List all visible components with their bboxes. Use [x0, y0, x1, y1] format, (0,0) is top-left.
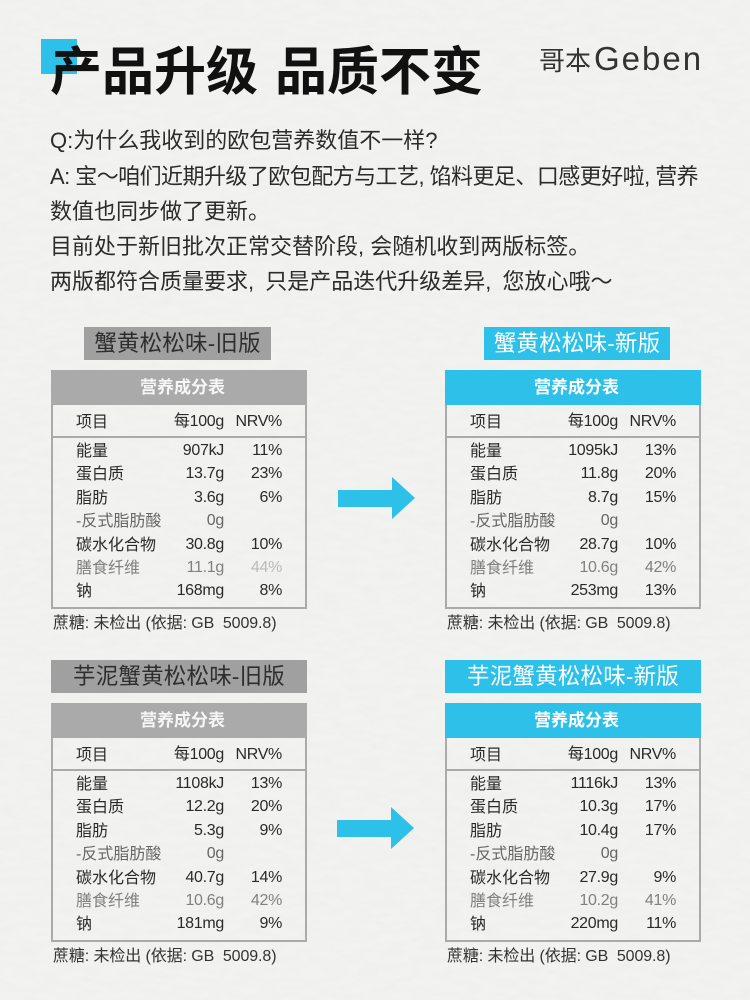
panel: old taro nutrition table: 13%	[251, 775, 282, 792]
panel: new crab roe nutrition table: 营养成分表	[534, 378, 619, 397]
panel: old crab roe nutrition table: 44%	[251, 559, 282, 576]
panel: old crab roe nutrition table: 碳水化合物	[76, 537, 156, 554]
panel: new crab roe nutrition table: 8.7g	[588, 489, 618, 506]
panel: old crab roe nutrition table: 钠	[76, 583, 92, 600]
panel: new crab roe nutrition table: 15%	[645, 489, 676, 506]
panel: new taro nutrition table: 11%	[646, 915, 676, 932]
panel: new crab roe nutrition table: 蛋白质	[470, 466, 518, 483]
panel: new taro nutrition table: 10.3g	[579, 798, 618, 815]
panel: old taro nutrition table: 20%	[251, 798, 282, 815]
panel: old taro nutrition table: 能量	[76, 776, 108, 793]
heading: old taro version	[51, 660, 307, 693]
panel: new taro nutrition table: 膳食纤维	[470, 893, 534, 910]
arrow: top	[338, 477, 415, 519]
panel: new taro nutrition table: 13%	[645, 775, 676, 792]
panel: new crab roe nutrition table: 能量	[470, 443, 502, 460]
logo: Geben: 哥本Geben	[539, 40, 703, 77]
panel: new taro nutrition table: 碳水化合物	[470, 870, 550, 887]
panel: old taro nutrition table	[51, 703, 307, 942]
text block: Q and A intro: Q:为什么我收到的欧包营养数值不一样?	[50, 128, 437, 153]
panel: old taro nutrition table: 42%	[251, 892, 282, 909]
panel: old taro nutrition table: 钠	[76, 916, 92, 933]
title: 产品升级 品质不变	[50, 44, 483, 102]
panel: old crab roe nutrition table: 11%	[252, 442, 282, 459]
heading: new taro version: 芋泥蟹黄松松味-新版	[467, 664, 679, 689]
panel: new crab roe nutrition table: 11.8g	[581, 465, 618, 482]
panel: new crab roe nutrition table: 膳食纤维	[470, 560, 534, 577]
panel: new crab roe nutrition table: 每100g	[568, 413, 618, 430]
panel: old crab roe nutrition table: 30.8g	[185, 536, 224, 553]
panel: old crab roe nutrition table: 营养成分表	[140, 378, 225, 397]
panel: new taro nutrition table: 17%	[645, 822, 676, 839]
panel: old crab roe nutrition table: 每100g	[174, 413, 224, 430]
panel: old crab roe nutrition table: -反式脂肪酸	[76, 513, 161, 530]
panel: new taro nutrition table	[445, 703, 701, 942]
panel: old crab roe nutrition table: 脂肪	[76, 490, 108, 507]
panel: old taro nutrition table: 12.2g	[185, 798, 224, 815]
panel: old crab roe nutrition table: 11.1g	[187, 559, 224, 576]
panel: old crab roe nutrition table: 蛋白质	[76, 466, 124, 483]
panel: new taro nutrition table: NRV%	[629, 746, 676, 763]
panel: new crab roe nutrition table: 253mg	[571, 582, 618, 599]
panel: old taro nutrition table: 膳食纤维	[76, 893, 140, 910]
panel: old crab roe nutrition table: 膳食纤维	[76, 560, 140, 577]
panel: new crab roe nutrition table: 10.6g	[579, 559, 618, 576]
panel: old crab roe nutrition table: 13.7g	[185, 465, 224, 482]
text block: Q and A intro: 数值也同步做了更新。	[50, 199, 270, 224]
panel: new crab roe nutrition table: 28.7g	[579, 536, 618, 553]
panel: new crab roe nutrition table: 42%	[645, 559, 676, 576]
text block: Q and A intro: 两版都符合质量要求, 只是产品迭代升级差异, 您放心哦～	[50, 269, 612, 294]
panel: new taro nutrition table: 1116kJ	[571, 775, 618, 792]
heading: new crab roe version: 蟹黄松松味-新版	[494, 331, 660, 356]
text block: Q and A intro	[50, 128, 698, 294]
panel: new crab roe nutrition table: 项目	[470, 414, 502, 431]
panel: old taro nutrition table: 1108kJ	[175, 775, 224, 792]
panel: old crab roe nutrition table: 8%	[259, 582, 282, 599]
panel: new crab roe nutrition table: 20%	[645, 465, 676, 482]
panel: old taro nutrition table: 每100g	[174, 746, 224, 763]
panel: old taro nutrition table: 碳水化合物	[76, 870, 156, 887]
panel: old taro nutrition table: 蛋白质	[76, 799, 124, 816]
note: sucrose old crab roe: 蔗糖: 未检出 (依据: GB 5009.8)	[53, 615, 276, 632]
panel: new taro nutrition table: 17%	[645, 798, 676, 815]
panel: old crab roe nutrition table: NRV%	[235, 413, 282, 430]
note: sucrose new crab roe: 蔗糖: 未检出 (依据: GB 5009.8)	[447, 615, 670, 632]
panel: old taro nutrition table: 9%	[259, 915, 282, 932]
panel: old taro nutrition table: 脂肪	[76, 823, 108, 840]
panel: old taro nutrition table: 5.3g	[194, 822, 224, 839]
panel: old crab roe nutrition table: 项目	[76, 414, 108, 431]
panel: new crab roe nutrition table: NRV%	[629, 413, 676, 430]
text block: Q and A intro: A: 宝～咱们近期升级了欧包配方与工艺, 馅料更足、口感更好啦, 营养	[50, 164, 698, 189]
panel: new crab roe nutrition table: -反式脂肪酸	[470, 513, 555, 530]
panel: old taro nutrition table: 10.6g	[185, 892, 224, 909]
panel: new crab roe nutrition table	[445, 370, 701, 609]
panel: old crab roe nutrition table: 907kJ	[183, 442, 224, 459]
panel: new taro nutrition table: 9%	[653, 869, 676, 886]
panel: old taro nutrition table: 营养成分表	[140, 711, 225, 730]
panel: new taro nutrition table: 27.9g	[579, 869, 618, 886]
note: sucrose new taro: 蔗糖: 未检出 (依据: GB 5009.8)	[447, 948, 670, 965]
heading: old taro version: 芋泥蟹黄松松味-旧版	[73, 664, 285, 689]
panel: new taro nutrition table: 钠	[470, 916, 486, 933]
panel: new taro nutrition table: 每100g	[568, 746, 618, 763]
panel: old crab roe nutrition table: 能量	[76, 443, 108, 460]
panel: old taro nutrition table: 9%	[259, 822, 282, 839]
heading: old crab roe version	[84, 327, 271, 360]
panel: old crab roe nutrition table: 23%	[251, 465, 282, 482]
panel: new taro nutrition table: 脂肪	[470, 823, 502, 840]
panel: new taro nutrition table: 10.2g	[579, 892, 618, 909]
panel: old crab roe nutrition table: 6%	[259, 489, 282, 506]
panel: old taro nutrition table: 14%	[251, 869, 282, 886]
icon: title accent square	[41, 39, 77, 74]
panel: new taro nutrition table: 220mg	[571, 915, 618, 932]
panel: new crab roe nutrition table: 13%	[645, 442, 676, 459]
panel: old crab roe nutrition table: 168mg	[177, 582, 224, 599]
panel: old crab roe nutrition table	[51, 370, 307, 609]
heading: new crab roe version	[484, 327, 670, 360]
panel: old crab roe nutrition table: 10%	[251, 536, 282, 553]
panel: old crab roe nutrition table: 0g	[207, 512, 224, 529]
panel: new crab roe nutrition table: 10%	[645, 536, 676, 553]
panel: old taro nutrition table: 40.7g	[185, 869, 224, 886]
text block: Q and A intro: 目前处于新旧批次正常交替阶段, 会随机收到两版标签。	[50, 234, 590, 259]
panel: new crab roe nutrition table: 碳水化合物	[470, 537, 550, 554]
panel: new crab roe nutrition table: 脂肪	[470, 490, 502, 507]
panel: new crab roe nutrition table: 0g	[601, 512, 618, 529]
panel: new taro nutrition table: 蛋白质	[470, 799, 518, 816]
panel: new taro nutrition table: -反式脂肪酸	[470, 846, 555, 863]
panel: new taro nutrition table: 项目	[470, 747, 502, 764]
panel: new taro nutrition table: 营养成分表	[534, 711, 619, 730]
panel: new taro nutrition table: 0g	[601, 845, 618, 862]
panel: new taro nutrition table: 10.4g	[579, 822, 618, 839]
heading: old crab roe version: 蟹黄松松味-旧版	[94, 331, 261, 356]
arrow: bottom	[337, 807, 414, 849]
panel: new taro nutrition table: 41%	[645, 892, 676, 909]
panel: old taro nutrition table: -反式脂肪酸	[76, 846, 161, 863]
heading: new taro version	[445, 660, 701, 693]
panel: new taro nutrition table: 能量	[470, 776, 502, 793]
panel: old taro nutrition table: NRV%	[235, 746, 282, 763]
note: sucrose old taro: 蔗糖: 未检出 (依据: GB 5009.8)	[53, 948, 276, 965]
panel: old crab roe nutrition table: 3.6g	[194, 489, 224, 506]
panel: new crab roe nutrition table: 钠	[470, 583, 486, 600]
panel: old taro nutrition table: 181mg	[177, 915, 224, 932]
panel: new crab roe nutrition table: 13%	[645, 582, 676, 599]
panel: old taro nutrition table: 0g	[207, 845, 224, 862]
panel: new crab roe nutrition table: 1095kJ	[568, 442, 618, 459]
panel: old taro nutrition table: 项目	[76, 747, 108, 764]
